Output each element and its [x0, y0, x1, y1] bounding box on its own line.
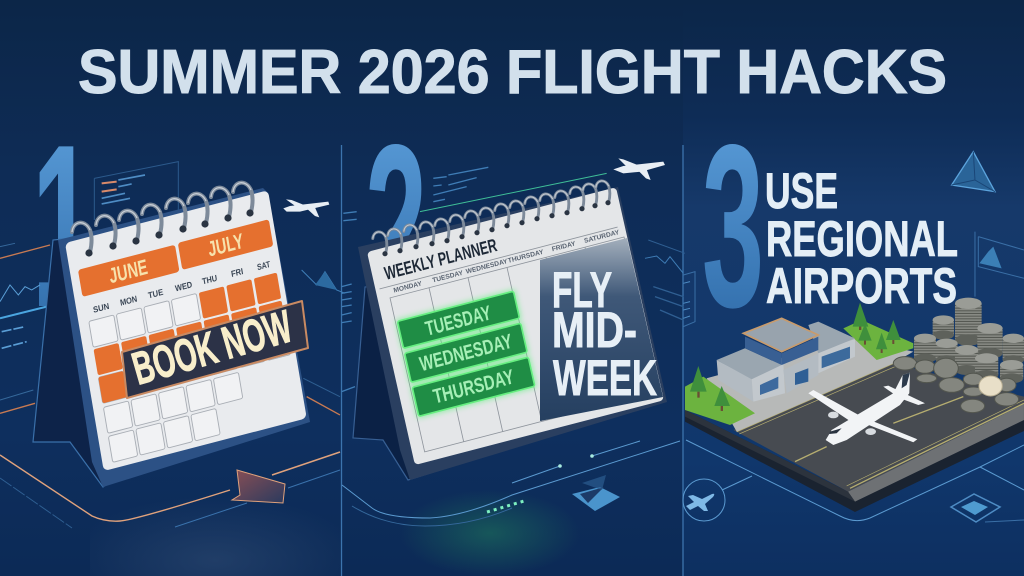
- runway surface: [733, 363, 1024, 492]
- band: Tuesday: TUESDAY: [423, 301, 493, 341]
- diamond plane icon panel 2: [572, 475, 620, 511]
- weekday labels: THU: [201, 273, 218, 286]
- airplane: [808, 373, 925, 445]
- blue-green circuit lines: [342, 441, 680, 526]
- calendar rings: [72, 183, 254, 257]
- fly mid-week text block: [540, 238, 663, 421]
- runway markings: [737, 363, 1024, 488]
- weekday labels: FRIDAY: [551, 240, 577, 253]
- fly mid-week text block: FLY: [552, 262, 612, 318]
- calendar stand: [353, 187, 667, 480]
- heading use regional airports: AIRPORTS: [766, 258, 957, 314]
- band: Wednesday: WEDNESDAY: [417, 330, 515, 376]
- weekday labels: SAT: [256, 259, 271, 272]
- band glow: [395, 289, 537, 419]
- calendar stand: [33, 188, 310, 487]
- month: June: [78, 245, 180, 297]
- panel: fly mid-week: [342, 97, 685, 526]
- weekday labels: TUE: [147, 287, 164, 300]
- panel: regional airports: [683, 97, 1024, 522]
- weekday labels: FRI: [230, 266, 244, 279]
- small plane panel 1: [283, 199, 329, 217]
- title: SUMMER 2026 FLIGHT HACKS: [78, 38, 947, 107]
- background decorations panel 3: [683, 152, 1024, 327]
- terminal building: [717, 318, 855, 402]
- weekday labels: WED: [174, 279, 193, 293]
- month: July: JULY: [206, 229, 245, 262]
- orange circuit line and plane marker: [0, 452, 340, 528]
- calendar page: [65, 190, 307, 471]
- month: July: [178, 219, 273, 270]
- band: Wednesday: [405, 323, 527, 382]
- weekday labels: SATURDAY: [584, 229, 621, 245]
- highlighted orange dates: [89, 273, 291, 403]
- weekday labels: TUESDAY: [432, 270, 464, 284]
- calendar cells: [89, 273, 301, 462]
- weekday labels: [92, 259, 271, 315]
- circuit lines panel 3: [686, 440, 1024, 522]
- background tech decorations panel 1: [0, 162, 345, 415]
- icon: plane in circle: [683, 479, 725, 521]
- airport platform: [685, 298, 1024, 512]
- book now banner: [122, 300, 308, 398]
- fly mid-week text block: MID-: [552, 302, 637, 358]
- band: Tuesday: [397, 291, 520, 348]
- band: Thursday: THURSDAY: [431, 365, 516, 409]
- fly mid-week text block: WEEK: [553, 350, 657, 406]
- back lawn: [843, 320, 913, 360]
- coin stacks: [914, 298, 1024, 383]
- apron: [707, 338, 913, 432]
- weekday labels: THURSDAY: [507, 249, 545, 265]
- panel: regional airports: 3: [702, 97, 764, 356]
- planner page: [367, 187, 664, 465]
- planner grid: [380, 226, 659, 454]
- icon: diamond: [951, 494, 1000, 522]
- platform base: [685, 405, 1024, 512]
- planner heading: WEEKLY PLANNER: [382, 234, 499, 284]
- panel: fly mid-week: 2: [365, 97, 427, 356]
- weekday labels: MONDAY: [393, 280, 423, 295]
- loose coins: [893, 357, 1019, 413]
- book now banner: BOOK NOW: [126, 300, 298, 395]
- month: June: JUNE: [107, 255, 149, 288]
- calendar rings: [373, 181, 611, 256]
- trees: [690, 303, 901, 411]
- panel: book now: 1: [32, 97, 94, 356]
- small plane panel 2: [613, 158, 665, 180]
- left lawn: [685, 377, 755, 425]
- band: Thursday: [412, 357, 535, 416]
- weekday labels: [393, 229, 621, 295]
- background tech decorations panel 2: [342, 167, 685, 392]
- weekday labels: WEDNESDAY: [465, 258, 509, 276]
- weekday labels: MON: [119, 294, 138, 308]
- weekday labels: SUN: [92, 301, 110, 315]
- heading use regional airports: REGIONAL: [766, 211, 958, 267]
- panel: book now: [0, 97, 345, 528]
- panel dividers: [342, 145, 683, 576]
- heading use regional airports: USE: [765, 163, 838, 219]
- heading use regional airports: [765, 163, 958, 314]
